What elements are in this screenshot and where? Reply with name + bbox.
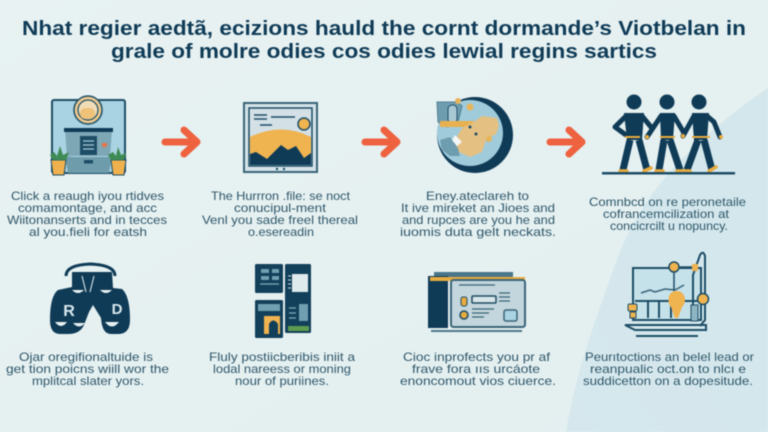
caption: step 2	[202, 189, 358, 239]
panel: step 1	[7, 96, 167, 239]
panel: step 2	[202, 103, 358, 239]
icon: desk with monitor and plants	[50, 96, 126, 175]
caption: step 5: get tion poicns wiill wor the	[6, 362, 169, 376]
caption: step 4: cofrancemcilization at	[603, 207, 730, 221]
caption: step 3	[400, 189, 556, 239]
caption: step 5: Ojar oregifionaltuide is	[19, 350, 153, 364]
caption: step 6: lodal nareess or moning	[213, 362, 351, 376]
caption: step 8: reanpualic oct.on to nlcı e	[590, 362, 746, 376]
title: grale of molre odies cos odies lewial regins sartics	[111, 40, 657, 63]
caption: step 8: Peurıtoctions an belel lead or	[585, 350, 754, 364]
caption: step 2: Venl you sade freel thereal	[202, 213, 358, 227]
caption: step 3: and rupces are you he and	[402, 213, 555, 227]
caption: step 4: Comnbcd on re peronetaile	[589, 195, 746, 209]
caption: step 3: Eney.ateclareh to	[426, 189, 529, 203]
title	[22, 17, 746, 63]
panel: step 6	[209, 264, 355, 388]
icon: app panels	[255, 264, 311, 338]
caption: step 1: al you.fieli for eatsh	[29, 225, 147, 239]
panel: step 4	[589, 94, 746, 233]
arrow 3	[550, 130, 582, 154]
icon: three people walking	[602, 94, 735, 174]
arrow 2	[365, 130, 397, 154]
caption: step 8	[583, 350, 754, 388]
panel: step 8	[583, 253, 754, 388]
title: Nhat regier aedtã, ecizions hauld the cornt dormande’s Viotbelan in	[22, 17, 746, 40]
caption: step 2: The Hurrron .file: se noct	[211, 189, 351, 203]
icon: monitor with chart and bulb	[625, 253, 708, 336]
caption: step 6: Fluly postiicberibis iniit a	[209, 350, 355, 364]
icon: globe map	[437, 97, 513, 173]
icon: binoculars with letters: R	[63, 303, 75, 320]
icon: framed landscape	[244, 103, 317, 172]
caption: step 2: conucipul-ment	[234, 201, 327, 215]
panel: step 5	[6, 264, 169, 388]
caption: step 1: Click a reaugh iyou rtidves	[11, 189, 164, 203]
icon: binoculars with letters: D	[112, 301, 123, 318]
background swoosh	[566, 88, 768, 432]
caption: step 6: nour of puriines.	[235, 374, 329, 388]
caption: step 4: concicrcilt u nopuncy.	[610, 219, 728, 233]
caption: step 2: o.esereadin	[248, 225, 314, 239]
arrow 1	[165, 130, 197, 154]
icon: browser card	[428, 272, 525, 331]
caption: step 3: It ive mireket an Jioes and	[401, 201, 555, 215]
caption: step 8: suddicetton on a dopesitude.	[583, 374, 753, 388]
caption: step 1	[7, 189, 167, 239]
panel: step 7	[400, 272, 556, 388]
caption: step 4	[589, 195, 746, 233]
caption: step 7: enoncomout vios ciuerce.	[400, 374, 556, 388]
panel: step 3	[400, 97, 556, 239]
caption: step 5: mplitcal slater yors.	[32, 374, 144, 388]
caption: step 7	[400, 350, 556, 388]
caption: step 1: Wiitonanserts and in tecces	[7, 213, 167, 227]
caption: step 5	[6, 350, 169, 388]
caption: step 7: Cioc inprofects you pr af	[403, 350, 551, 364]
caption: step 3: iuomis duta gelt neckats.	[400, 225, 556, 239]
icon: binoculars with letters	[50, 264, 130, 334]
caption: step 6	[209, 350, 355, 388]
caption: step 1: comamontage, and acc	[18, 201, 157, 215]
caption: step 7: frave fora ııs urcáote	[412, 362, 540, 376]
